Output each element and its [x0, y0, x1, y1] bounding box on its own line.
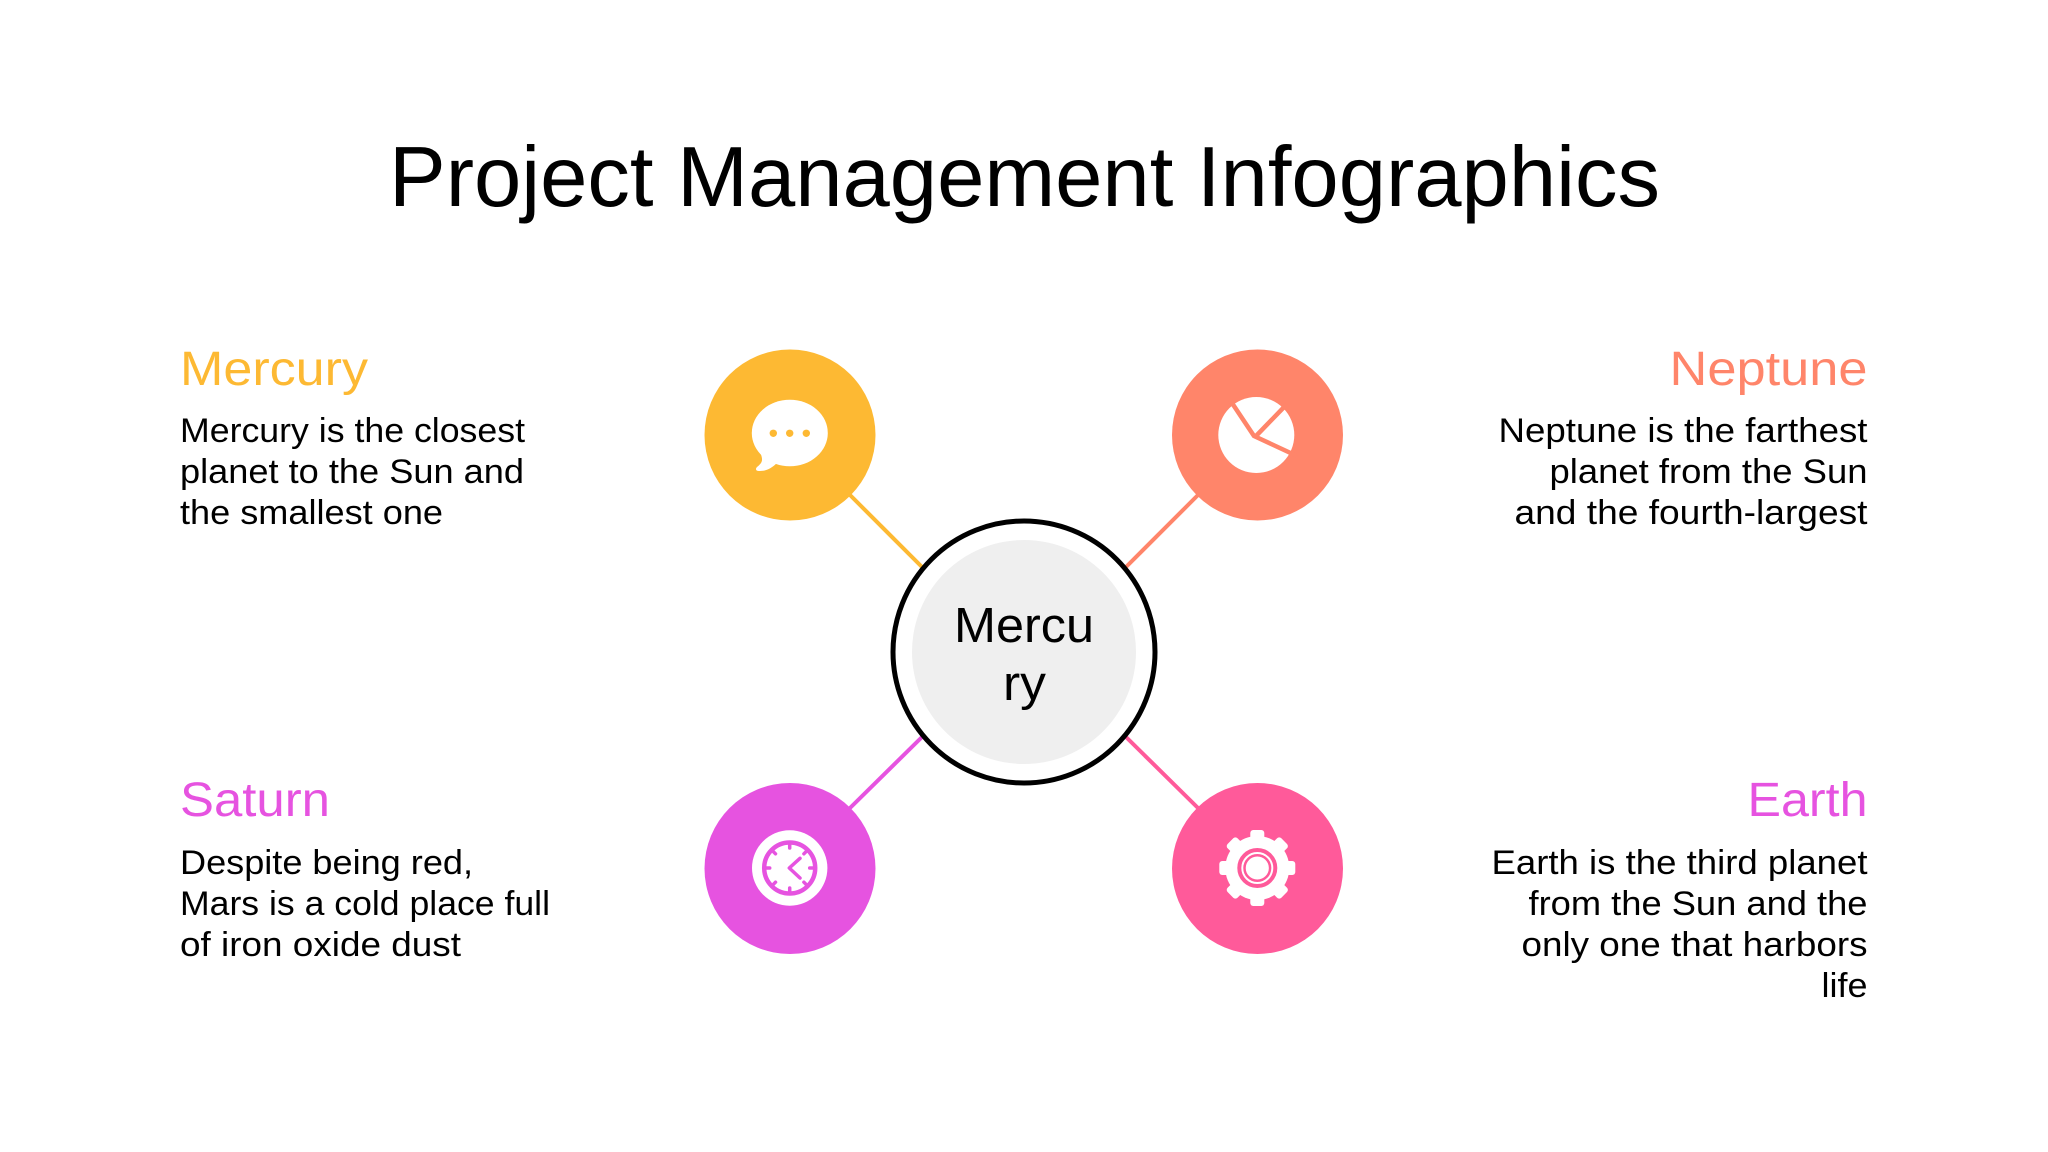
text block: Neptune: Neptune: [1670, 343, 1868, 396]
text block: Earth: Earth: [1748, 774, 1868, 827]
text block: Earth: only one that harbors: [1522, 926, 1868, 964]
text block: Neptune: planet from the Sun: [1550, 453, 1868, 491]
text block: Mercury: [180, 343, 526, 532]
text block: Earth: Earth is the third planet: [1492, 844, 1868, 882]
text block: Saturn: Mars is a cold place full: [180, 885, 550, 923]
connector: Mercury: [850, 495, 922, 567]
text block: Mercury: Mercury: [180, 343, 368, 396]
text block: Neptune: [1498, 343, 1868, 532]
center hub: [893, 521, 1155, 783]
text block: Earth: from the Sun and the: [1528, 885, 1868, 923]
text block: Saturn: Despite being red,: [180, 844, 473, 882]
icon: speech bubble on yellow circle: [704, 350, 876, 520]
text block: Saturn: [180, 774, 550, 964]
icon: pie chart on orange circle: [1172, 350, 1343, 520]
text block: Mercury: Mercury is the closest: [180, 412, 526, 450]
connector: Neptune: [1126, 495, 1198, 567]
text block: Mercury: planet to the Sun and: [180, 453, 524, 491]
text block: Neptune: Neptune is the farthest: [1498, 412, 1868, 450]
center hub: Mercu: [954, 599, 1094, 653]
text block: Neptune: and the fourth-largest: [1514, 494, 1868, 532]
icon: clock on magenta circle: [704, 783, 876, 954]
text block: Saturn: of iron oxide dust: [180, 926, 462, 964]
title: Project Management Infographics: [389, 130, 1660, 225]
icon: gear on pink circle: [1172, 783, 1343, 954]
text block: Mercury: the smallest one: [180, 494, 443, 532]
connector: Earth: [1126, 737, 1198, 808]
text block: Earth: [1492, 774, 1868, 1005]
text block: Saturn: Saturn: [180, 774, 330, 827]
center hub: ry: [1003, 657, 1047, 711]
connector: Saturn: [850, 737, 922, 808]
text block: Earth: life: [1822, 967, 1868, 1005]
